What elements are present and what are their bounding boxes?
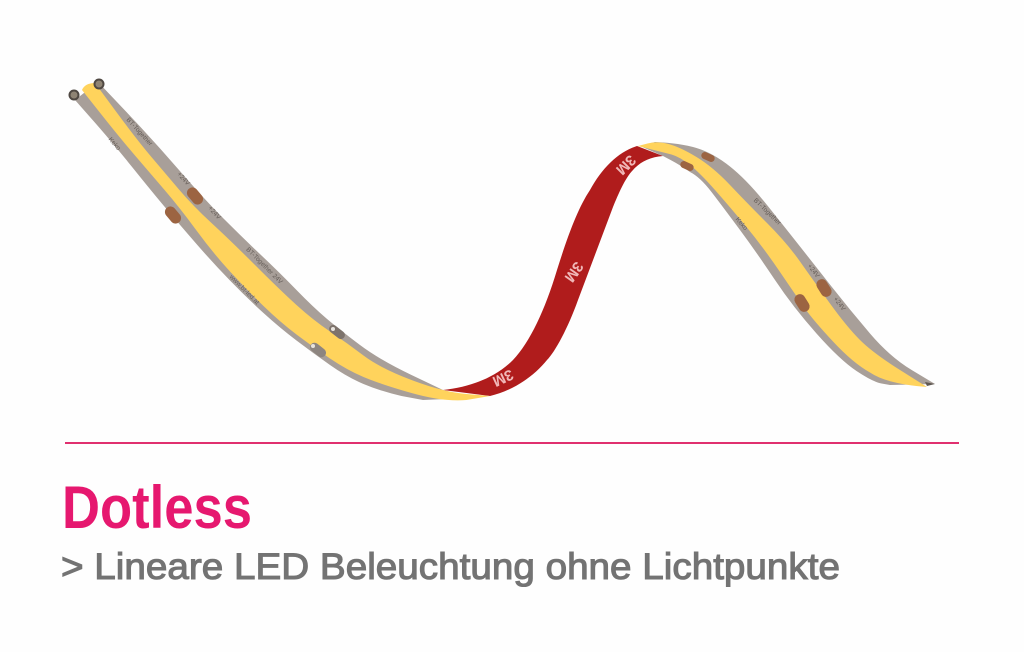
connection screws [70, 80, 104, 100]
right strip section, yellow light band [638, 142, 927, 387]
reflective pads on the lower curve [308, 323, 347, 359]
printed markings on the carrier: BT-Together [752, 197, 783, 227]
red adhesive backing with 3M marks: 3M [490, 365, 516, 390]
left strip section, silver carrier [75, 82, 470, 400]
right strip section, silver carrier [640, 142, 935, 385]
printed markings on the carrier: +24V [206, 205, 222, 222]
printed markings on the carrier [107, 116, 847, 313]
printed markings on the carrier: Keko [734, 216, 749, 232]
red adhesive backing with 3M marks: 3M [561, 258, 587, 285]
divider line [65, 442, 959, 444]
subtitle: > Lineare LED Beleuchtung ohne Lichtpunkte [61, 546, 840, 587]
printed markings on the carrier: +24V [832, 296, 847, 313]
LED strip [70, 80, 935, 400]
printed markings on the carrier: +24V [806, 263, 821, 280]
red adhesive backing with 3M marks: 3M [612, 151, 639, 178]
printed markings on the carrier: BT-Together 24V [244, 246, 284, 286]
printed markings on the carrier: BT-Together [125, 116, 154, 148]
solder pads [163, 151, 834, 314]
left strip section, yellow light band [82, 83, 490, 400]
printed markings on the carrier: Keko [107, 136, 122, 152]
printed markings on the carrier: +24V [175, 171, 191, 188]
printed markings on the carrier: www.bt-led.at [227, 273, 260, 306]
strip end tip [925, 382, 935, 386]
title: Dotless [62, 474, 252, 541]
red adhesive backing with 3M marks [443, 146, 663, 396]
